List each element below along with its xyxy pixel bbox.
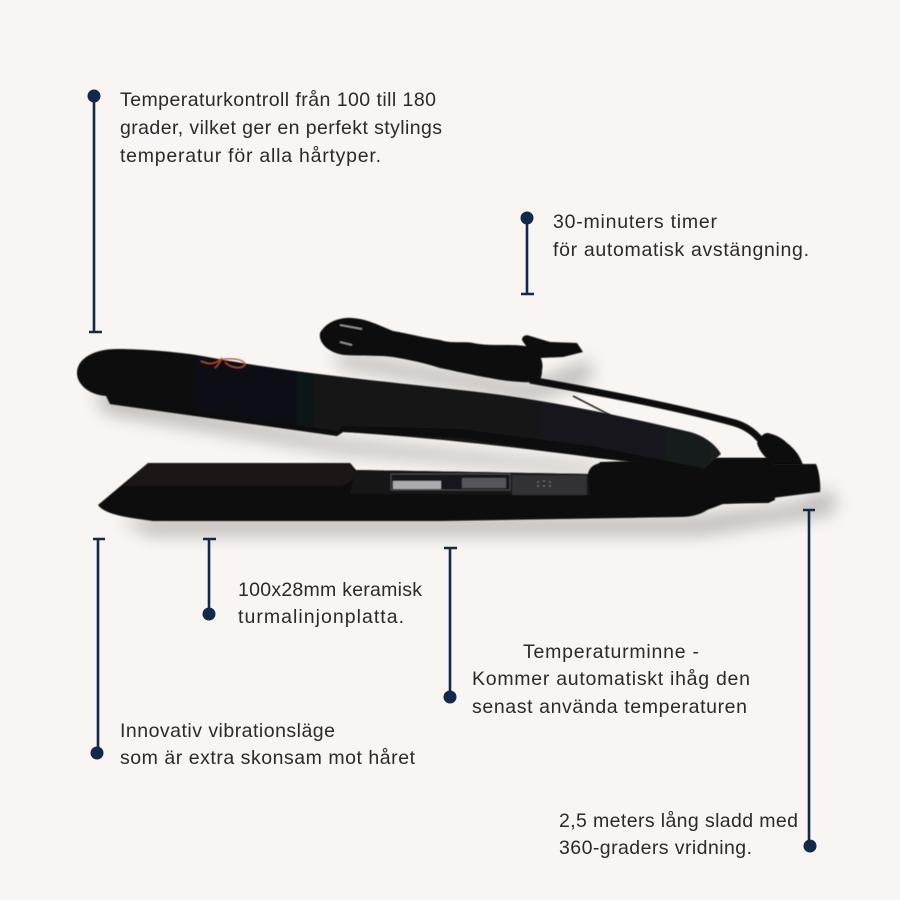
power cord xyxy=(320,318,803,465)
collar and end cap xyxy=(716,458,820,503)
callout: vibration mode xyxy=(90,539,416,769)
marker dot xyxy=(804,840,816,852)
text: 100x28mm keramisk xyxy=(238,579,422,601)
marker line xyxy=(521,219,534,294)
text: Temperaturkontroll från 100 till 180 xyxy=(120,89,436,111)
marker dot xyxy=(520,212,534,224)
lower arm xyxy=(98,458,770,521)
text: senast använda temperaturen xyxy=(472,696,747,718)
cord bundle xyxy=(320,318,542,382)
text: som är extra skonsam mot håret xyxy=(120,747,416,769)
callout: temperature control xyxy=(88,89,442,332)
upper arm xyxy=(77,349,721,470)
text: 2,5 meters lång sladd med xyxy=(559,810,798,832)
text: 30-minuters timer xyxy=(553,211,718,233)
hinge pad xyxy=(588,463,690,502)
marker line xyxy=(89,97,102,332)
text: 360-graders vridning. xyxy=(559,837,752,859)
marker line xyxy=(93,539,105,752)
marker dot xyxy=(444,690,456,704)
text: Innovativ vibrationsläge xyxy=(120,720,335,742)
marker line xyxy=(203,539,216,613)
display xyxy=(391,474,510,490)
marker dot xyxy=(202,608,216,620)
callout: cord xyxy=(559,510,816,859)
control panel xyxy=(350,470,590,495)
text: Temperaturminne - xyxy=(523,641,699,663)
strain relief xyxy=(757,433,803,465)
text: turmalinjonplatta. xyxy=(238,606,404,628)
buttons xyxy=(537,480,551,487)
ceramic plate xyxy=(124,463,354,486)
marker line xyxy=(444,548,457,696)
text: för automatisk avstängning. xyxy=(553,239,809,261)
marker dot xyxy=(90,746,104,760)
product: hair straightener xyxy=(77,318,835,534)
marker line xyxy=(803,510,815,845)
marker dot xyxy=(88,90,100,102)
shadows xyxy=(95,352,835,534)
text: Kommer automatiskt ihåg den xyxy=(472,668,750,690)
logo xyxy=(201,359,245,368)
text: grader, vilket ger en perfekt stylings xyxy=(120,117,442,139)
text: temperatur för alla hårtyper. xyxy=(120,145,381,167)
callout: timer xyxy=(520,211,809,294)
lower trim xyxy=(108,398,703,470)
callout: temperature memory xyxy=(444,548,750,718)
plug xyxy=(522,335,583,358)
callout: ceramic plate xyxy=(202,539,422,628)
